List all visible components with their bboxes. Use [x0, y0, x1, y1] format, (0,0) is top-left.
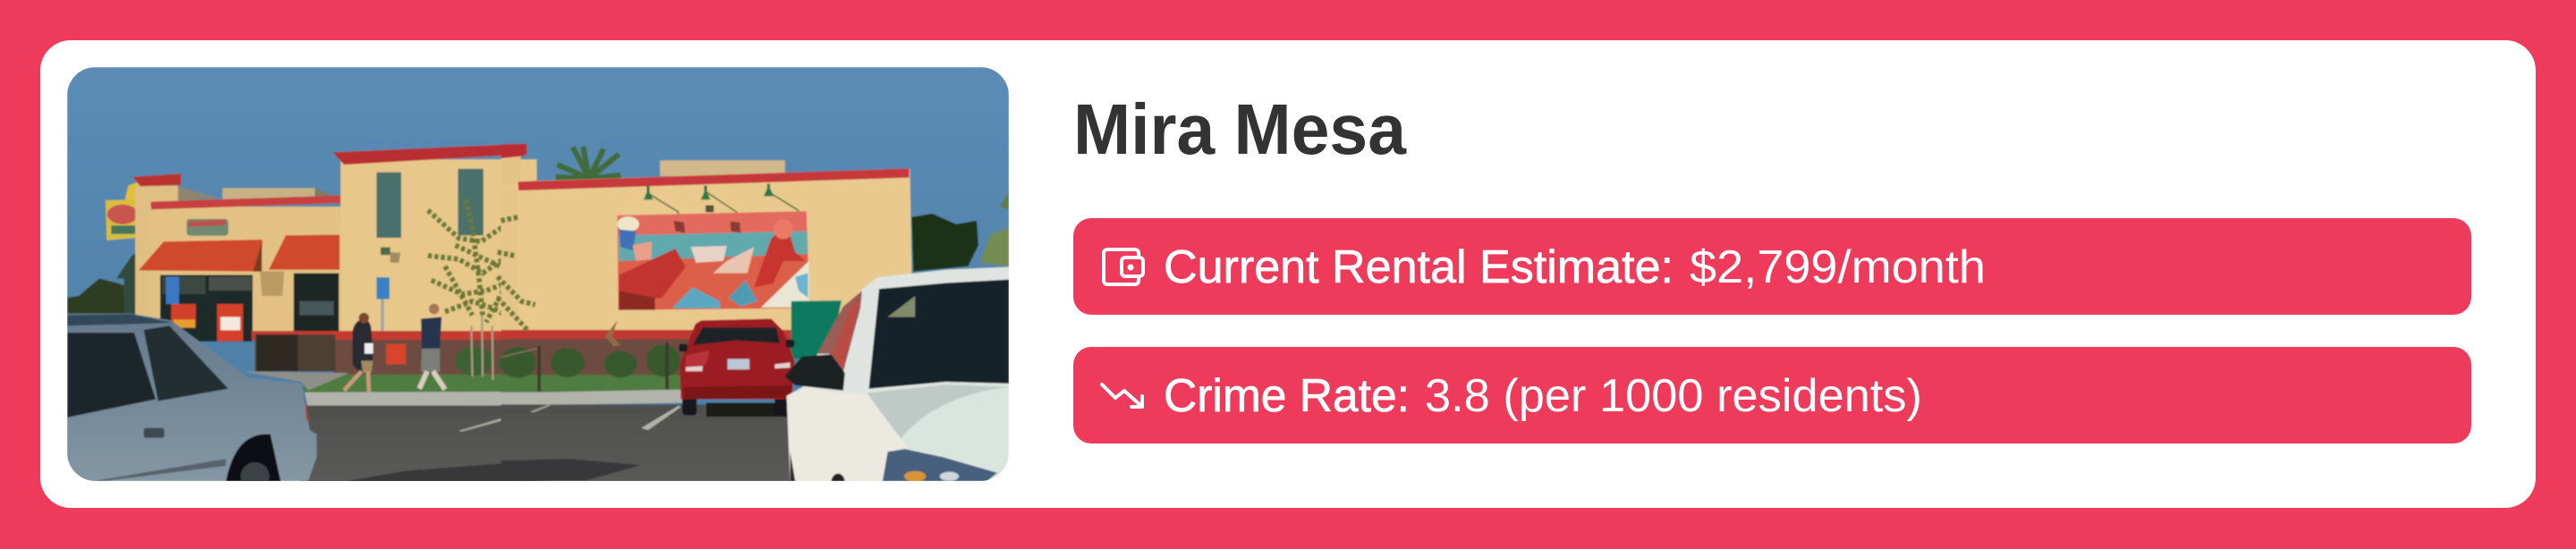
left part of street scene [67, 144, 538, 490]
crime label: Crime Rate: [1164, 370, 1410, 422]
rental label: Current Rental Estimate: [1164, 241, 1674, 293]
icon: trending down arrow [1102, 384, 1142, 407]
red car [679, 318, 794, 417]
mural on wall [617, 211, 809, 310]
green dumpster [792, 300, 842, 359]
white car [784, 266, 1009, 482]
title: Mira Mesa [1073, 89, 1406, 169]
rental value: $2,799/month [1690, 241, 1986, 293]
right part of street scene [501, 144, 1009, 336]
rental estimate bar [1073, 218, 2471, 315]
icon: wallet [1104, 249, 1143, 284]
photo: Popeyes building and parking lot in Mira Mesa [67, 67, 1009, 490]
crime value: 3.8 (per 1000 residents) [1425, 370, 1922, 422]
crime rate bar [1073, 347, 2471, 443]
